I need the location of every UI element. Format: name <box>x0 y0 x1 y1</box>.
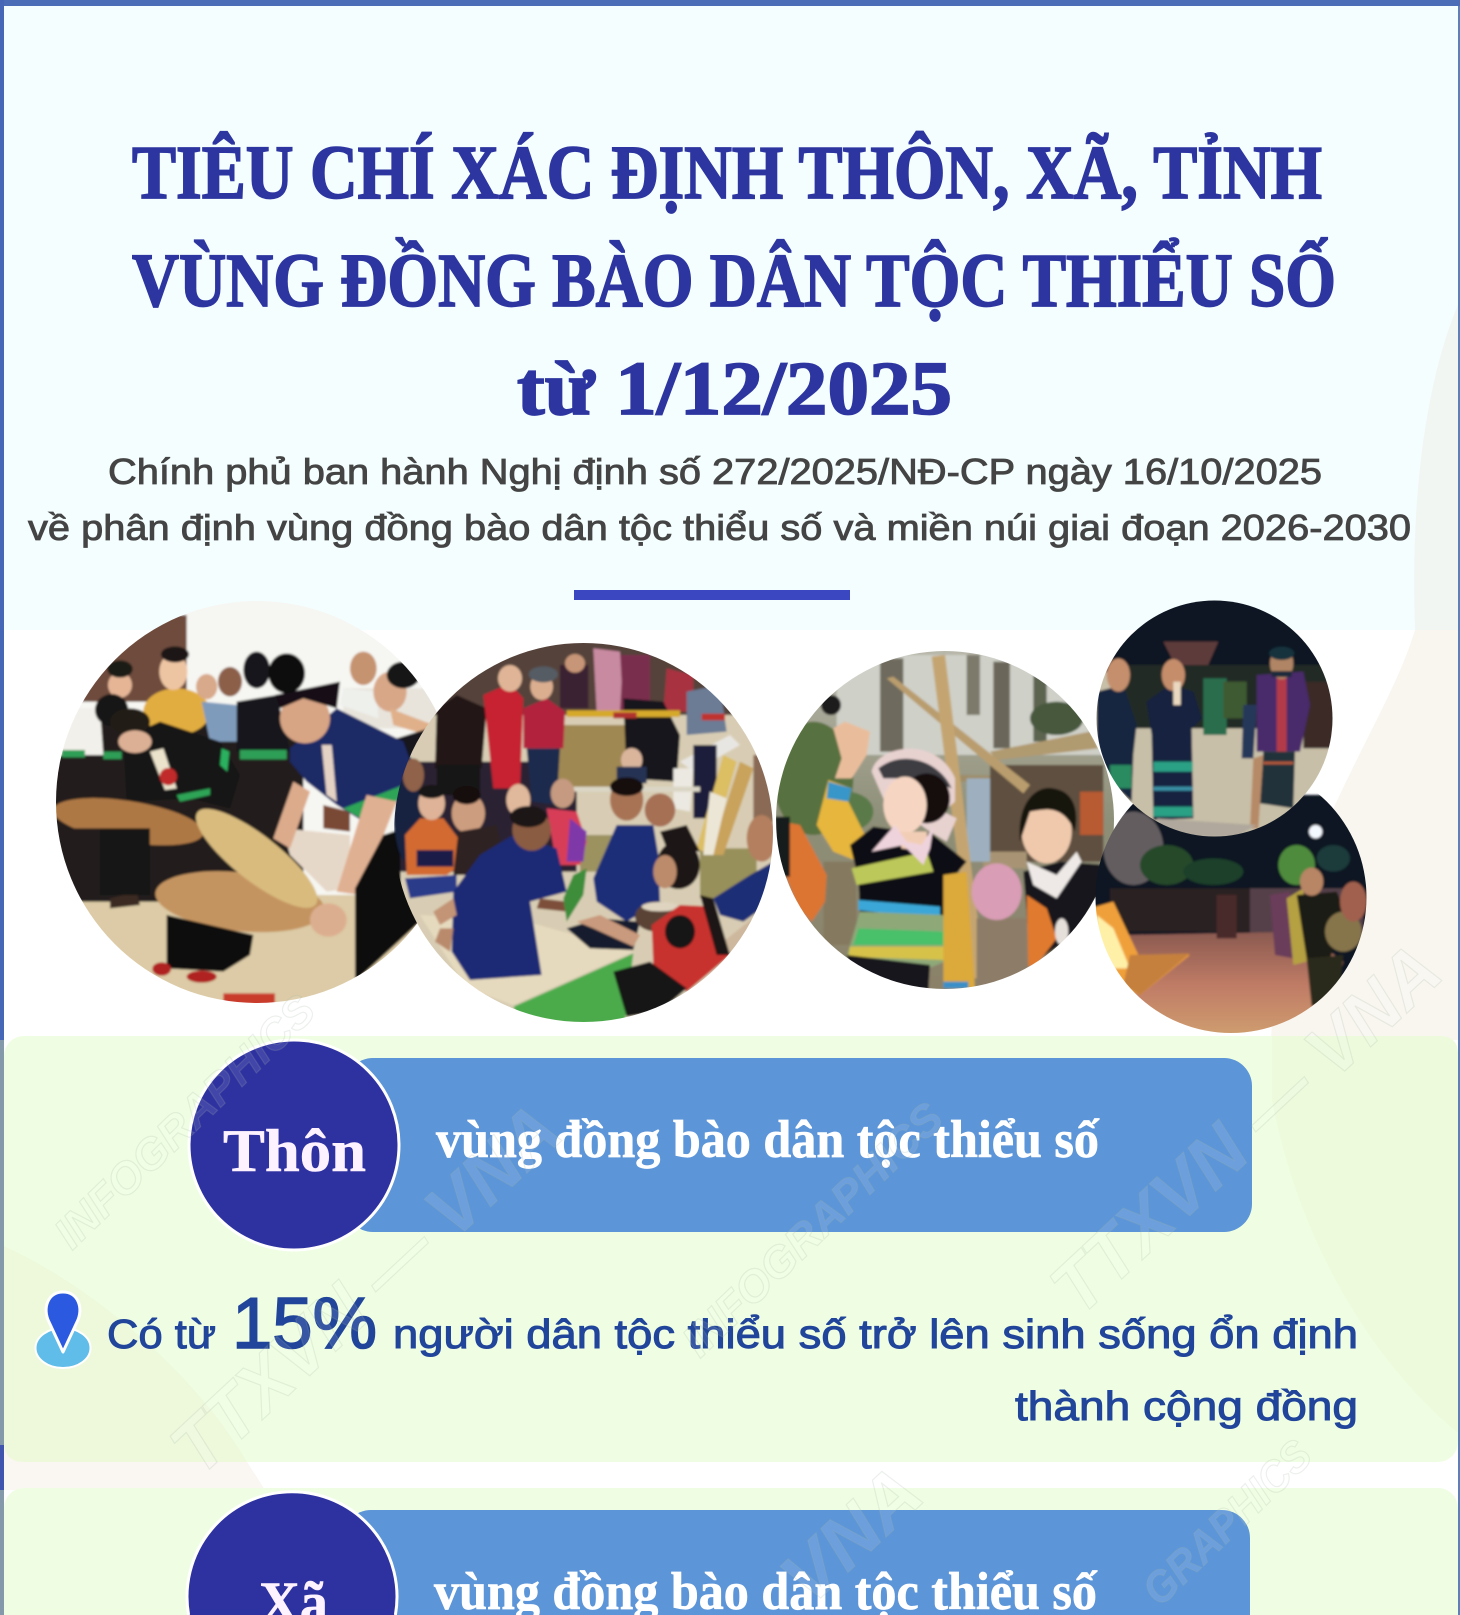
badge: Thôn: Thôn <box>223 1118 366 1184</box>
watermarks: INFOGRAPHICS <box>673 1093 953 1366</box>
criterion text: Thôn: 15% <box>232 1284 377 1364</box>
badge: Thôn <box>189 1040 399 1250</box>
photo: man and woman exchanging rice seedling <box>393 635 785 1035</box>
pill: Thôn header bar: vùng đồng bào dân tộc thiểu số <box>436 1111 1099 1169</box>
photo collage <box>50 595 1380 1040</box>
photo: night festival with bonfire <box>1090 795 1380 1040</box>
watermarks: GRAPHICS <box>1133 1431 1322 1615</box>
subtitle text: Chính phủ ban hành Nghị định số 272/2025/NĐ-CP ngày 16/10/2025 <box>108 451 1322 492</box>
criterion text: Thôn <box>107 1284 1358 1429</box>
divider bar <box>574 590 850 600</box>
title: từ 1/12/2025 <box>517 347 952 431</box>
criterion text: Thôn: thành cộng đồng <box>1015 1383 1358 1429</box>
icon: location pin <box>36 1292 90 1368</box>
photo: Hmong women in colourful dress <box>770 645 1120 995</box>
panel: Xã <box>4 1488 1458 1615</box>
watermarks: TTXVN — VNA <box>154 1088 577 1490</box>
criterion text: Thôn: Có từ <box>107 1311 216 1357</box>
watermarks: TTXVN — VNA <box>1034 928 1457 1330</box>
criterion text: Thôn: người dân tộc thiểu số trở lên sinh sống ổn định <box>393 1311 1358 1357</box>
watermarks: INFOGRAPHICS <box>45 985 325 1258</box>
title <box>132 131 1336 431</box>
subtitle text <box>28 451 1411 548</box>
subtitle text: về phân định vùng đồng bào dân tộc thiểu số và miền núi giai đoạn 2026-2030 <box>28 507 1411 548</box>
pill: Xã header bar <box>343 1510 1250 1615</box>
panel: Thôn <box>4 1036 1458 1462</box>
watermarks <box>45 928 1457 1615</box>
photo: women and man in woven dress at night <box>1096 600 1332 836</box>
badge: Xã <box>187 1492 397 1615</box>
photo: women winnowing rice <box>50 595 450 1015</box>
watermarks: VNA <box>764 1450 938 1615</box>
pill: Thôn header bar <box>345 1058 1252 1232</box>
